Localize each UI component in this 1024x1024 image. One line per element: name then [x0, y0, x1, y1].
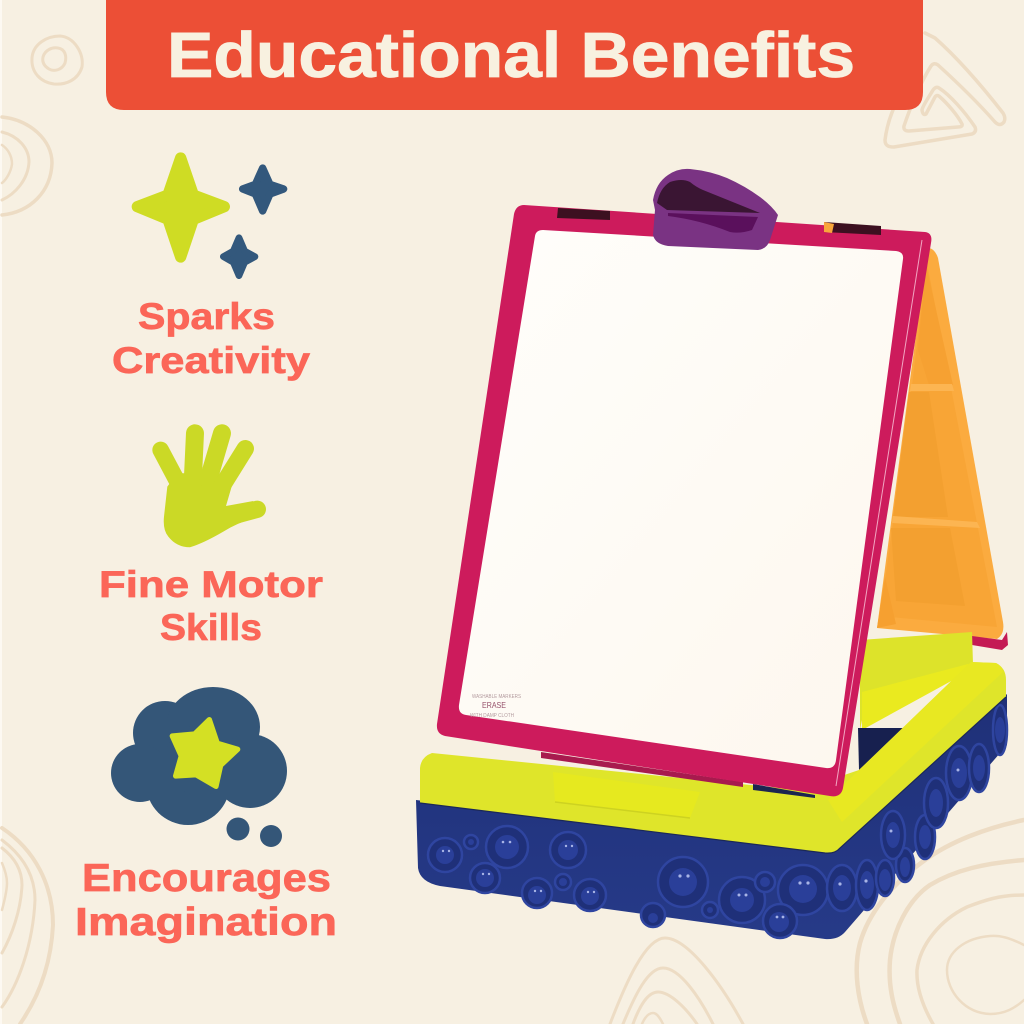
- whiteboard: [459, 230, 903, 768]
- purple clip: [653, 169, 778, 250]
- label: Sparks Creativity: Creativity: [112, 340, 310, 381]
- label: Sparks Creativity: [112, 296, 310, 381]
- label: Encourages Imagination: Imagination: [75, 901, 337, 944]
- title: Educational Benefits: [167, 19, 855, 91]
- label: Fine Motor Skills: Fine Motor: [99, 564, 323, 605]
- small erase note on board: [470, 694, 522, 719]
- small erase note on board: ERASE: [482, 701, 506, 710]
- label: Encourages Imagination: Encourages: [82, 857, 331, 900]
- title banner: [106, 0, 923, 110]
- icon: hand: [161, 433, 257, 547]
- icon: sparkles: [137, 158, 284, 276]
- yellow base tray: [420, 632, 1006, 853]
- product: tabletop easel: [416, 169, 1008, 939]
- bubble rings: [428, 705, 1007, 938]
- magenta frame: [437, 205, 931, 796]
- label: Fine Motor Skills: Skills: [160, 607, 262, 648]
- label: Encourages Imagination: [75, 857, 337, 944]
- small erase note on board: WASHABLE MARKERS: [472, 694, 522, 700]
- orange back panel: [877, 248, 1008, 650]
- label: Sparks Creativity: Sparks: [138, 296, 275, 337]
- label: Fine Motor Skills: [99, 564, 323, 648]
- icon: thought cloud with star: [111, 687, 287, 847]
- bubble domes: [436, 717, 1005, 932]
- small erase note on board: WITH DAMP CLOTH: [470, 713, 514, 719]
- navy base with bubble relief: [416, 694, 1007, 939]
- bubble highlights: [442, 768, 960, 918]
- top frame slots: [557, 208, 881, 235]
